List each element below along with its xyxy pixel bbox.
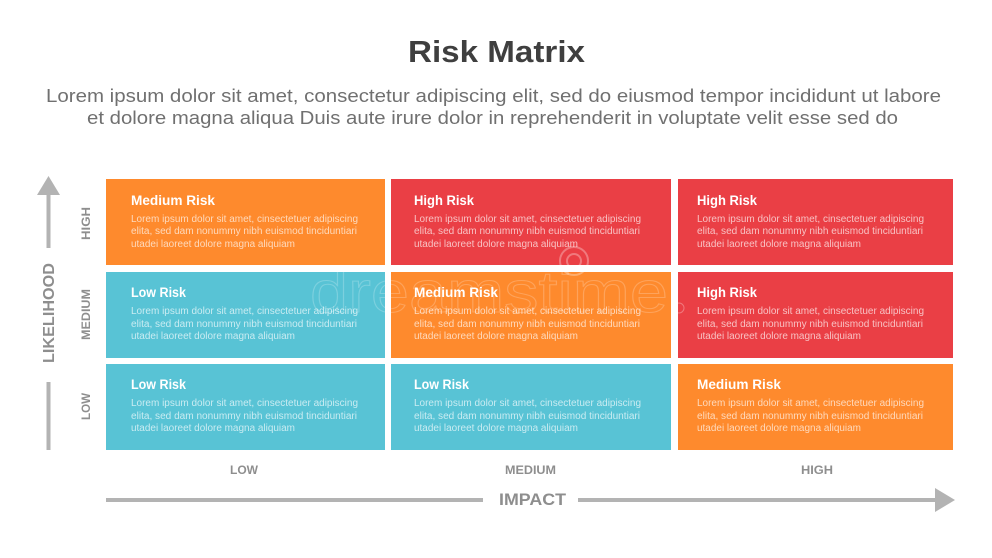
subtitle text block: et dolore magna aliqua Duis aute irure dolor in reprehenderit in voluptate velit esse sed do xyxy=(87,107,898,128)
panel: high likelihood, high impact: Lorem ipsum dolor sit amet, cinsectetuer adipiscing xyxy=(697,214,924,225)
panel: medium likelihood, high impact: utadei laoreet dolore magna aliquiam xyxy=(697,331,861,342)
arrow: impact axis xyxy=(106,488,955,512)
panel: high likelihood, high impact: High Risk xyxy=(697,193,757,208)
subtitle text block: Lorem ipsum dolor sit amet, consectetur adipiscing elit, sed do eiusmod tempor incididunt ut labore xyxy=(46,85,941,106)
panel: high likelihood, low impact: elita, sed dam nonummy nibh euismod tinciduntiari xyxy=(131,226,357,237)
likelihood axis label: LIKELIHOOD xyxy=(41,263,58,363)
panel: high likelihood, medium impact: High Risk xyxy=(414,193,474,208)
panel: high likelihood, medium impact: utadei laoreet dolore magna aliquiam xyxy=(414,239,578,250)
column label: low: LOW xyxy=(230,463,259,477)
row label: low: LOW xyxy=(81,393,93,420)
panel: medium likelihood, low impact: Low Risk xyxy=(131,285,186,300)
panel: low likelihood, low impact: elita, sed dam nonummy nibh euismod tinciduntiari xyxy=(131,411,357,422)
panel: medium likelihood, medium impact: Medium Risk xyxy=(414,285,498,300)
subtitle text block xyxy=(46,85,941,128)
panel: high likelihood, medium impact: Lorem ipsum dolor sit amet, cinsectetuer adipiscing xyxy=(414,214,641,225)
title: Risk Matrix xyxy=(408,34,586,69)
panel: medium likelihood, medium impact: Lorem ipsum dolor sit amet, cinsectetuer adipiscing xyxy=(414,306,641,317)
panel: medium likelihood, low impact: utadei laoreet dolore magna aliquiam xyxy=(131,331,295,342)
panel: high likelihood, high impact: elita, sed dam nonummy nibh euismod tinciduntiari xyxy=(697,226,923,237)
panel: low likelihood, medium impact: Lorem ipsum dolor sit amet, cinsectetuer adipiscing xyxy=(414,398,641,409)
panel: medium likelihood, medium impact xyxy=(391,272,671,358)
panel: low likelihood, high impact: elita, sed dam nonummy nibh euismod tinciduntiari xyxy=(697,411,923,422)
arrow: likelihood axis xyxy=(37,176,60,450)
panel: medium likelihood, high impact: High Risk xyxy=(697,285,757,300)
panel: high likelihood, low impact: utadei laoreet dolore magna aliquiam xyxy=(131,239,295,250)
panel: low likelihood, high impact: utadei laoreet dolore magna aliquiam xyxy=(697,423,861,434)
panel: low likelihood, low impact: Lorem ipsum dolor sit amet, cinsectetuer adipiscing xyxy=(131,398,358,409)
panel: medium likelihood, high impact: elita, sed dam nonummy nibh euismod tinciduntiari xyxy=(697,319,923,330)
panel: low likelihood, high impact: Medium Risk xyxy=(697,377,781,392)
panel: high likelihood, high impact: utadei laoreet dolore magna aliquiam xyxy=(697,239,861,250)
panel: medium likelihood, low impact: Lorem ipsum dolor sit amet, cinsectetuer adipiscing xyxy=(131,306,358,317)
panel: low likelihood, low impact: utadei laoreet dolore magna aliquiam xyxy=(131,423,295,434)
panel: high likelihood, low impact: Medium Risk xyxy=(131,193,215,208)
panel: low likelihood, medium impact: utadei laoreet dolore magna aliquiam xyxy=(414,423,578,434)
impact axis label: IMPACT xyxy=(499,490,567,509)
panel: medium likelihood, medium impact: utadei laoreet dolore magna aliquiam xyxy=(414,331,578,342)
row label: high: HIGH xyxy=(81,207,93,240)
panel: low likelihood, medium impact xyxy=(391,364,671,450)
column label: high: HIGH xyxy=(801,463,833,477)
panel: medium likelihood, low impact: elita, sed dam nonummy nibh euismod tinciduntiari xyxy=(131,319,357,330)
panel: high likelihood, low impact xyxy=(106,179,385,265)
panel: low likelihood, medium impact: Low Risk xyxy=(414,377,469,392)
column label: medium: MEDIUM xyxy=(505,463,556,477)
panel: low likelihood, low impact xyxy=(106,364,385,450)
panel: low likelihood, high impact: Lorem ipsum dolor sit amet, cinsectetuer adipiscing xyxy=(697,398,924,409)
panel: medium likelihood, medium impact: elita, sed dam nonummy nibh euismod tinciduntiari xyxy=(414,319,640,330)
panel: medium likelihood, high impact: Lorem ipsum dolor sit amet, cinsectetuer adipiscing xyxy=(697,306,924,317)
panel: high likelihood, medium impact xyxy=(391,179,671,265)
row label: medium: MEDIUM xyxy=(81,289,93,340)
panel: medium likelihood, low impact xyxy=(106,272,385,358)
panel: low likelihood, medium impact: elita, sed dam nonummy nibh euismod tinciduntiari xyxy=(414,411,640,422)
panel: high likelihood, low impact: Lorem ipsum dolor sit amet, cinsectetuer adipiscing xyxy=(131,214,358,225)
panel: high likelihood, high impact xyxy=(678,179,953,265)
watermark: dreamstime xyxy=(310,260,668,325)
panel: low likelihood, low impact: Low Risk xyxy=(131,377,186,392)
panel: medium likelihood, high impact xyxy=(678,272,953,358)
watermark xyxy=(310,247,684,325)
panel: low likelihood, high impact xyxy=(678,364,953,450)
panel: high likelihood, medium impact: elita, sed dam nonummy nibh euismod tinciduntiari xyxy=(414,226,640,237)
